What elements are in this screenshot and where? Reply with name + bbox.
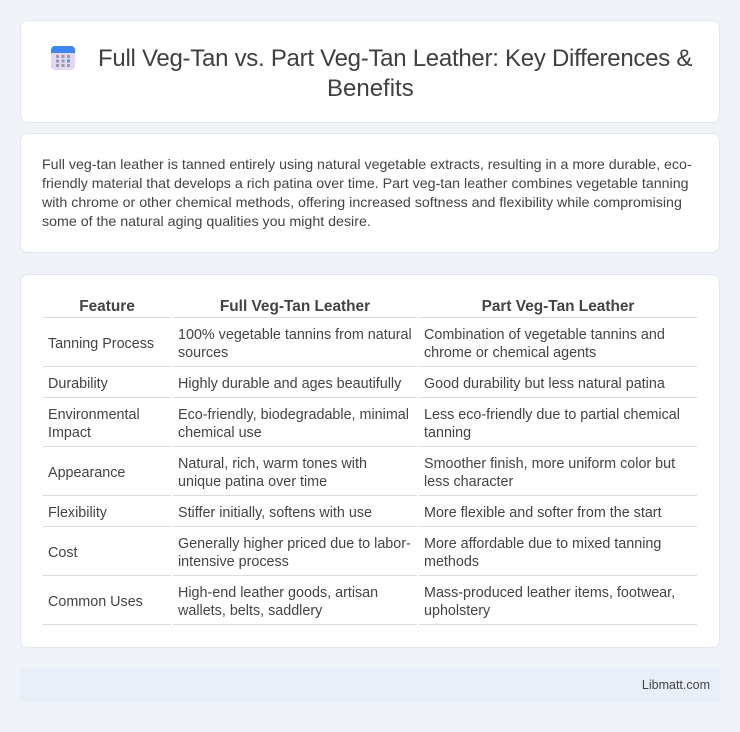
comparison table: Environmental xyxy=(48,407,140,423)
title: Benefits xyxy=(327,75,414,102)
comparison table: Full Veg-Tan Leather xyxy=(220,298,370,314)
comparison table: Generally higher priced due to labor- xyxy=(178,536,411,552)
text block: description: friendly material that develops a rich patina over time. Part veg-tan leather combines vegetable tanning xyxy=(42,176,689,192)
comparison table: Stiffer initially, softens with use xyxy=(178,505,372,521)
comparison table: Less eco-friendly due to partial chemical xyxy=(424,407,680,423)
comparison table: Good durability but less natural patina xyxy=(424,376,665,392)
comparison table: Tanning Process xyxy=(48,336,154,352)
text block: description: some of the natural aging qualities you might desire. xyxy=(42,214,371,230)
comparison table: High-end leather goods, artisan xyxy=(178,585,378,601)
comparison table: Highly durable and ages beautifully xyxy=(178,376,401,392)
text block: description: with chrome or other chemical methods, offering increased softness and flexibility while compromising xyxy=(42,195,682,211)
panel: title card xyxy=(20,20,720,123)
comparison table: chemical use xyxy=(178,425,262,441)
title: Full Veg-Tan vs. Part Veg-Tan Leather: Key Differences & xyxy=(98,45,692,72)
comparison table: Impact xyxy=(48,425,91,441)
comparison table: Common Uses xyxy=(48,594,143,610)
comparison table: Feature xyxy=(79,298,135,314)
comparison table: wallets, belts, saddlery xyxy=(178,603,322,619)
comparison table: Flexibility xyxy=(48,505,107,521)
text block: description: Full veg-tan leather is tanned entirely using natural vegetable extracts, resulting in a more durable, eco- xyxy=(42,157,692,173)
icon: calendar xyxy=(51,46,75,70)
comparison table: Mass-produced leather items, footwear, xyxy=(424,585,675,601)
comparison table: upholstery xyxy=(424,603,490,619)
comparison table: More flexible and softer from the start xyxy=(424,505,662,521)
comparison table: Combination of vegetable tannins and xyxy=(424,327,665,343)
panel: table card xyxy=(20,274,720,648)
comparison table: methods xyxy=(424,554,479,570)
comparison table: Part Veg-Tan Leather xyxy=(482,298,634,314)
comparison table: unique patina over time xyxy=(178,474,327,490)
comparison table: tanning xyxy=(424,425,471,441)
comparison table: 100% vegetable tannins from natural xyxy=(178,327,412,343)
comparison table: chrome or chemical agents xyxy=(424,345,596,361)
comparison table: Natural, rich, warm tones with xyxy=(178,456,367,472)
comparison table: sources xyxy=(178,345,228,361)
title xyxy=(98,45,692,102)
comparison table: less character xyxy=(424,474,513,490)
comparison table: intensive process xyxy=(178,554,289,570)
comparison table: Appearance xyxy=(48,465,125,481)
comparison table: More affordable due to mixed tanning xyxy=(424,536,661,552)
footer source text: Libmatt.com xyxy=(642,678,710,692)
panel: description card xyxy=(20,133,720,253)
comparison table: Durability xyxy=(48,376,108,392)
comparison table xyxy=(43,298,697,625)
comparison table: Cost xyxy=(48,545,78,561)
comparison table: Smoother finish, more uniform color but xyxy=(424,456,675,472)
footer xyxy=(20,668,720,702)
text block: description xyxy=(42,157,692,230)
comparison table: Eco-friendly, biodegradable, minimal xyxy=(178,407,409,423)
